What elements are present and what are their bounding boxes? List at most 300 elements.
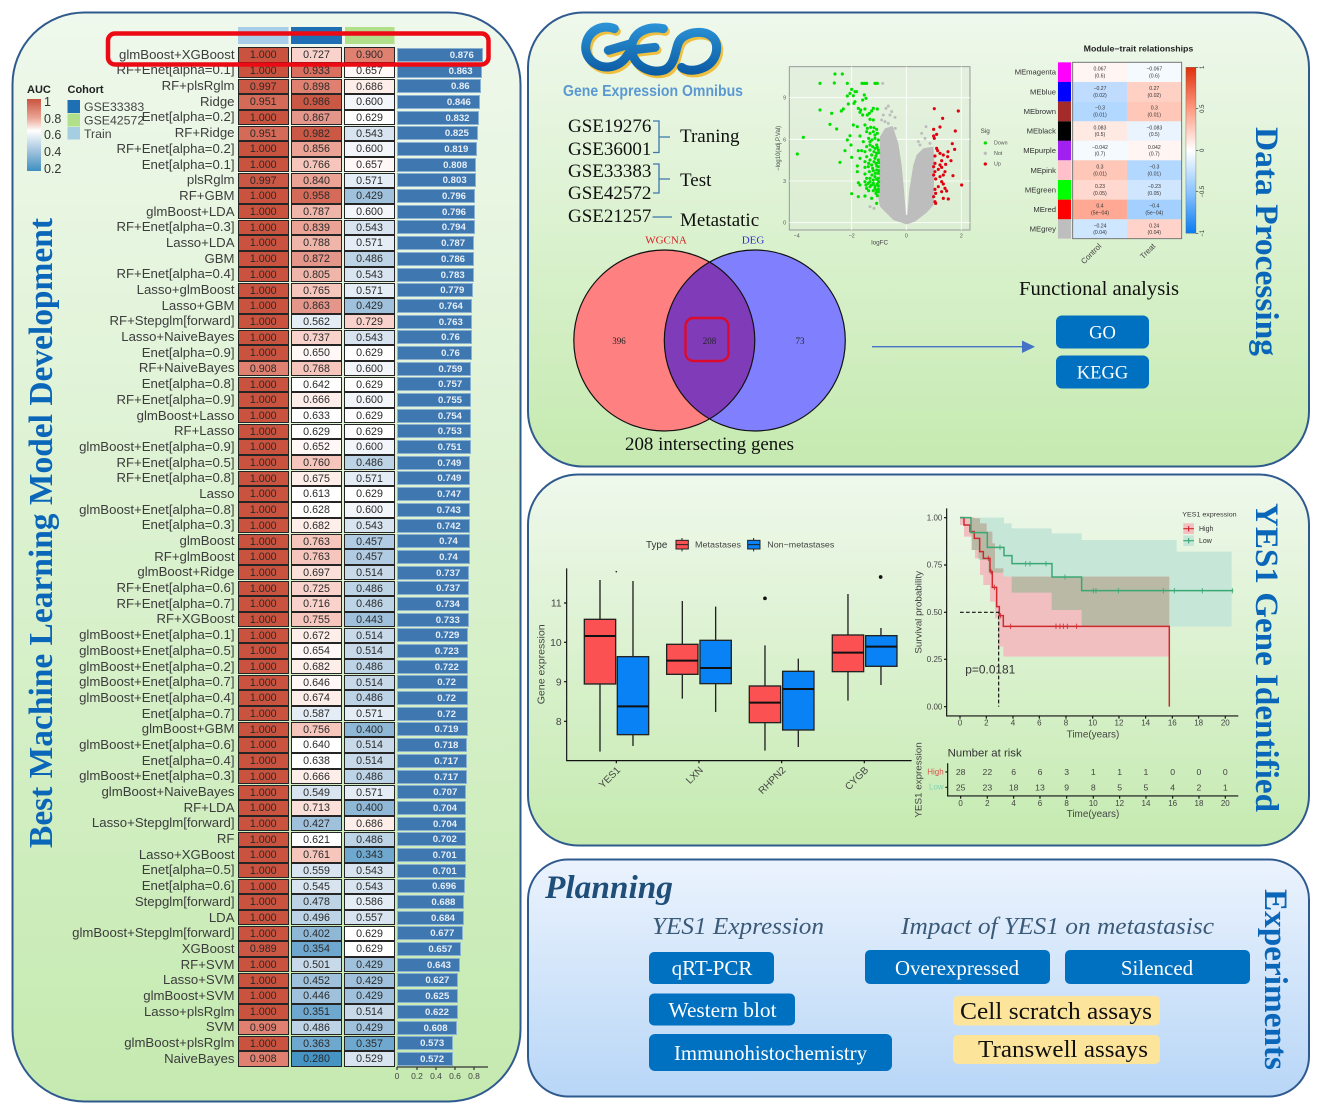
row: Enet 0.1: 0.808 <box>443 160 467 171</box>
row: RF+Enet 0.8: 0.675 <box>303 473 330 485</box>
row: Lasso+glmBoost: Lasso+glmBoost <box>137 282 234 297</box>
module-trait heatmap: (0.01) <box>1093 171 1107 177</box>
row: Enet 0.8: 0.642 <box>303 379 330 391</box>
row: Enet 0.1: 0.766 <box>303 159 330 171</box>
row: RF+Enet 0.3 <box>116 219 475 235</box>
module-trait heatmap: (0.05) <box>1093 191 1107 197</box>
number at risk table: Low <box>929 783 944 792</box>
row: SVM: 0.608 <box>424 1023 448 1034</box>
row: glmBoost+plsRglm: 1.000 <box>250 1038 277 1050</box>
row: RF+GBM: 1.000 <box>250 190 277 202</box>
number at risk table: 1 <box>1223 782 1228 792</box>
row: Enet 0.5 <box>0 863 500 878</box>
row: RF+XGBoost: 1.000 <box>250 614 277 626</box>
row: glmBoost+Enet 0.2: 0.682 <box>303 661 330 673</box>
row: RF+Enet 0.9: 0.600 <box>356 394 383 406</box>
row: glmBoost+SVM <box>0 988 500 1004</box>
row: RF+Ridge: 0.982 <box>303 128 330 140</box>
survival curve: Time(years) <box>1067 729 1119 740</box>
row: SVM: 0.486 <box>303 1022 330 1034</box>
row: Enet 0.3: 1.000 <box>250 520 277 532</box>
row: Stepglm: 0.586 <box>356 896 383 908</box>
volcano plot: 0 <box>783 221 786 227</box>
row: RF+glmBoost: 0.74 <box>439 552 458 563</box>
row: glmBoost+Ridge <box>137 564 469 580</box>
row: glmBoost+Enet 0.2: 0.486 <box>356 661 383 673</box>
dataset list: GSE19276 <box>568 116 651 137</box>
row: XGBoost: 0.989 <box>250 943 277 955</box>
row: RF+Enet 0.4: 0.805 <box>303 269 330 281</box>
legend: AUC colour scale: AUC <box>27 84 51 96</box>
row: Lasso+SVM: 0.429 <box>356 975 383 987</box>
number at risk table: Time(years) <box>1067 809 1119 820</box>
row: RF+Lasso: RF+Lasso <box>174 423 234 438</box>
row: glmBoost+Enet 0.5: 0.514 <box>356 645 383 657</box>
dataset list: Metastatic <box>680 210 759 231</box>
boxplot: gene expression: YES1 <box>597 765 623 791</box>
boxplot: gene expression: CYGB <box>843 765 871 793</box>
row: Lasso+plsRglm: 0.351 <box>303 1006 330 1018</box>
number at risk table: 28 <box>956 767 966 777</box>
row: glmBoost+Lasso: glmBoost+Lasso <box>137 408 234 423</box>
row: SVM: 0.909 <box>250 1022 277 1034</box>
row: glmBoost+Enet 0.4: 0.486 <box>356 692 383 704</box>
row: Lasso: 0.629 <box>356 488 383 500</box>
row: Enet 0.1 <box>142 157 476 172</box>
dataset list: GSE36001 <box>568 139 651 160</box>
row: glmBoost+plsRglm: 0.573 <box>420 1038 444 1049</box>
number at risk table: 8 <box>1064 799 1069 808</box>
row: Lasso+LDA <box>166 235 474 251</box>
row: Lasso+NaiveBayes: 1.000 <box>250 332 277 344</box>
row: RF+Enet 0.4 <box>116 266 474 282</box>
venn diagram: WGCNA <box>645 234 687 246</box>
row: Lasso+LDA: 0.788 <box>303 237 330 249</box>
row: Enet 0.1: 1.000 <box>250 159 277 171</box>
row: glmBoost+Enet 0.6: glmBoost+Enet[alpha=0.6] <box>79 737 234 752</box>
row: RF+Enet 0.8: RF+Enet[alpha=0.8] <box>116 470 234 485</box>
row: Lasso+LDA: Lasso+LDA <box>166 235 234 250</box>
number at risk table: 0 <box>1170 767 1175 777</box>
row: RF+Stepglm <box>110 313 472 329</box>
button: Immunohistochemistry <box>649 1034 892 1071</box>
boxplot: gene expression: RHPN2 <box>757 765 789 797</box>
module-trait heatmap: −1 <box>1200 229 1206 237</box>
module-trait heatmap: MEmagenta <box>1015 68 1057 77</box>
row: Enet 0.1: 0.657 <box>356 159 383 171</box>
row: RF+Enet 0.1: 1.000 <box>250 65 277 77</box>
row: XGBoost <box>0 941 500 957</box>
row: RF+GBM <box>179 188 475 204</box>
vertical title: Data Processing: Data Processing <box>1248 127 1284 357</box>
row: glmBoost+LDA: glmBoost+LDA <box>146 204 234 219</box>
module-trait heatmap: MEpurple <box>1023 146 1056 155</box>
legend: AUC colour scale: 1 <box>44 95 51 109</box>
vertical title: Experiments: Experiments <box>1257 889 1293 1070</box>
row: Enet 0.4 <box>0 753 500 769</box>
row: Enet 0.2: 1.000 <box>250 112 277 124</box>
row: glmBoost+Enet 0.9: glmBoost+Enet[alpha=0.9] <box>79 439 234 454</box>
number at risk table: 1 <box>1091 767 1096 777</box>
vertical title: Best Machine Learning Model Development: Best Machine Learning Model Development <box>23 217 60 848</box>
row: Enet 0.2: Enet[alpha=0.2] <box>142 109 234 124</box>
row: RF+NaiveBayes: RF+NaiveBayes <box>139 360 234 375</box>
row: RF+Enet 0.4: 0.783 <box>441 270 465 281</box>
row: Ridge: 0.600 <box>356 96 383 108</box>
row: LDA: 0.684 <box>431 913 455 924</box>
row: Enet 0.8: 0.757 <box>438 379 462 390</box>
volcano plot: Down <box>994 141 1008 147</box>
row: RF+Enet 0.2: RF+Enet[alpha=0.2] <box>116 141 234 156</box>
row: Lasso+Stepglm: 0.427 <box>303 818 330 830</box>
volcano plot: −log10(adj.P.Val) <box>776 126 782 171</box>
module-trait heatmap: Treat <box>1138 241 1158 261</box>
row: glmBoost+Ridge: 0.737 <box>436 568 460 579</box>
button: GO: GO <box>1089 324 1116 344</box>
row: Enet 0.1: Enet[alpha=0.1] <box>142 157 234 172</box>
row: RF+NaiveBayes: 0.759 <box>438 364 462 375</box>
row: RF+glmBoost: 0.763 <box>303 551 330 563</box>
volcano plot: 2 <box>960 233 963 239</box>
module-trait heatmap: 0.3 <box>1096 165 1104 171</box>
label: Transwell assays: Transwell assays <box>978 1036 1148 1063</box>
row: RF+Enet 0.5: 0.760 <box>303 457 330 469</box>
legend: AUC colour scale: 0.2 <box>44 162 61 176</box>
row: RF+Enet 0.5 <box>116 455 470 470</box>
legend: cohort: GSE42572 <box>84 114 144 128</box>
row: Enet 0.4: Enet[alpha=0.4] <box>142 753 234 768</box>
row: Enet 0.9: 0.76 <box>441 348 460 359</box>
row: RF+Enet 0.9: 1.000 <box>250 394 277 406</box>
module-trait heatmap: (0.5) <box>1149 132 1160 138</box>
row: glmBoost+XGBoost <box>119 47 483 62</box>
row: plsRglm: 0.997 <box>250 175 277 187</box>
row: glmBoost+Stepglm: 0.629 <box>356 928 383 940</box>
row: RF+Stepglm: 0.763 <box>439 317 463 328</box>
number at risk table: 6 <box>1038 767 1043 777</box>
volcano plot: 9 <box>783 96 786 102</box>
arrow to functional analysis <box>872 340 1035 353</box>
row: RF+plsRglm: 0.997 <box>250 81 277 93</box>
module-trait heatmap: (0.6) <box>1149 73 1160 79</box>
number at risk table: Number at risk <box>948 747 1022 759</box>
row: glmBoost+Enet 0.6: 1.000 <box>250 739 277 751</box>
row: RF+SVM: 0.429 <box>356 959 383 971</box>
row: RF+Enet 0.8: 0.749 <box>437 473 461 484</box>
row: RF+Enet 0.8 <box>116 470 470 486</box>
row: Lasso+NaiveBayes: 0.737 <box>303 332 330 344</box>
row: RF+Enet 0.6: RF+Enet[alpha=0.6] <box>116 580 234 595</box>
module-trait heatmap: −0.042 <box>1092 145 1108 151</box>
row: glmBoost+plsRglm: glmBoost+plsRglm <box>124 1035 234 1050</box>
vertical title: YES1 Gene Identified: YES1 Gene Identified <box>1248 503 1284 812</box>
row: glmBoost+Enet 0.9 <box>79 439 471 455</box>
row: Enet 0.6 <box>0 878 500 894</box>
row: RF+Lasso <box>174 423 471 439</box>
row: RF+Enet 0.1: 0.863 <box>449 66 473 77</box>
survival curve <box>914 508 1238 740</box>
row: RF+Enet 0.6 <box>116 580 469 596</box>
row: Lasso+GBM: Lasso+GBM <box>162 298 234 313</box>
number at risk table <box>913 742 1238 820</box>
row: glmBoost+Stepglm: 0.402 <box>303 928 330 940</box>
highlight box: top model <box>108 34 488 64</box>
row: GBM: 0.872 <box>303 253 330 265</box>
number at risk table: 0 <box>1197 767 1202 777</box>
row: glmBoost+NaiveBayes: 0.707 <box>433 787 457 798</box>
row: RF+Enet 0.5: 0.749 <box>437 458 461 469</box>
row: RF+Ridge: 0.951 <box>250 128 277 140</box>
row: glmBoost+Lasso: 0.754 <box>438 411 462 422</box>
row: Enet 0.3: Enet[alpha=0.3] <box>142 517 234 532</box>
module-trait heatmap: (0.6) <box>1095 73 1106 79</box>
row: RF+Enet 0.8: 1.000 <box>250 473 277 485</box>
row: RF+Stepglm: 0.562 <box>303 316 330 328</box>
row: RF+Enet 0.5: RF+Enet[alpha=0.5] <box>116 455 234 470</box>
number at risk table: 18 <box>1195 799 1204 808</box>
row: Lasso+NaiveBayes: 0.543 <box>356 332 383 344</box>
row: glmBoost+GBM: 1.000 <box>250 724 277 736</box>
row: Lasso+glmBoost: 1.000 <box>250 284 277 296</box>
boxplot: gene expression: Non−metastases <box>767 540 834 550</box>
row: RF+SVM: 0.643 <box>427 960 451 971</box>
panel: YES1 gene identified <box>528 474 1309 846</box>
cohort annotation strip <box>238 27 394 44</box>
row: Ridge: 0.846 <box>447 97 471 108</box>
row: glmBoost: 0.763 <box>303 536 330 548</box>
panel: planning experiments <box>528 860 1309 1096</box>
module-trait heatmap: MEred <box>1033 205 1056 214</box>
row: Lasso+XGBoost: 0.761 <box>303 849 330 861</box>
row: glmBoost+Enet 0.2: 1.000 <box>250 661 277 673</box>
row: Lasso+XGBoost <box>0 847 500 863</box>
button: KEGG <box>1056 356 1149 388</box>
module-trait heatmap: (0.04) <box>1148 230 1161 236</box>
row: Lasso: 0.747 <box>437 489 461 500</box>
row: Lasso+plsRglm: 0.514 <box>356 1006 383 1018</box>
row: Enet 0.9: 0.650 <box>303 347 330 359</box>
number at risk table: 13 <box>1035 782 1045 792</box>
row: glmBoost+Enet 0.4: 0.674 <box>303 692 330 704</box>
row: RF+Enet 0.6: 0.737 <box>436 583 460 594</box>
module-trait heatmap: MEblack <box>1027 127 1056 136</box>
boxplot: gene expression: 9 <box>556 677 562 688</box>
boxplot: gene expression: 8 <box>556 717 562 728</box>
row: Enet 0.8: 0.629 <box>356 379 383 391</box>
row: glmBoost+XGBoost: 0.900 <box>356 49 383 61</box>
row: glmBoost+Enet 0.3: glmBoost+Enet[alpha=0.3] <box>79 768 234 783</box>
row: glmBoost: glmBoost <box>180 533 234 548</box>
row: glmBoost+Enet 0.5: 1.000 <box>250 645 277 657</box>
row: glmBoost: 1.000 <box>250 536 277 548</box>
row: Enet 0.7 <box>0 706 500 722</box>
row: GBM <box>204 251 474 267</box>
logo caption: Gene Expression Omnibus <box>563 83 743 100</box>
row: glmBoost+Enet 0.4: glmBoost+Enet[alpha=0.4] <box>79 690 234 705</box>
row: RF+SVM: RF+SVM <box>181 957 234 972</box>
row: plsRglm: 0.571 <box>356 175 383 187</box>
row: Enet 0.5: 0.543 <box>356 865 383 877</box>
row: RF+Enet 0.3: 0.543 <box>356 222 383 234</box>
row: NaiveBayes: 0.908 <box>250 1053 277 1065</box>
number at risk table: 25 <box>956 782 966 792</box>
row: RF+Enet 0.7: 0.734 <box>436 599 460 610</box>
survival curve: YES1 expression <box>1182 512 1237 519</box>
row: SVM: SVM <box>206 1019 234 1034</box>
row: glmBoost+XGBoost: 0.876 <box>450 50 474 61</box>
row: glmBoost+Enet 0.1: glmBoost+Enet[alpha=0.1] <box>79 627 234 642</box>
heatmap and bar chart table <box>0 47 500 1069</box>
row: RF: 1.000 <box>250 834 277 846</box>
boxplot: gene expression: Type <box>646 540 668 551</box>
button: GO <box>1056 316 1149 348</box>
boxplot: gene expression: 11 <box>551 599 562 610</box>
survival curve: 0.75 <box>927 561 943 570</box>
row: RF+plsRglm: RF+plsRglm <box>162 78 234 93</box>
label: Cell scratch assays: Cell scratch assays <box>960 998 1152 1025</box>
legend: cohort <box>68 84 144 141</box>
survival curve: 1.00 <box>927 513 943 522</box>
row: glmBoost+Stepglm: 1.000 <box>250 928 277 940</box>
row: glmBoost+Enet 0.2 <box>79 659 468 674</box>
row: RF+Lasso: 0.629 <box>303 426 330 438</box>
row: RF+XGBoost: RF+XGBoost <box>156 611 234 626</box>
row: RF+Lasso: 0.629 <box>356 426 383 438</box>
module-trait heatmap: (0.01) <box>1148 113 1161 119</box>
venn caption: 208 intersecting genes <box>625 435 794 455</box>
row: Enet 0.9 <box>142 345 472 361</box>
survival curve: 20 <box>1221 719 1230 728</box>
row: Enet 0.9: 1.000 <box>250 347 277 359</box>
survival curve: p=0.0181 <box>965 663 1015 676</box>
button: Immunohistochemistry: Immunohistochemistry <box>674 1041 867 1065</box>
row: Lasso+glmBoost: 0.571 <box>356 284 383 296</box>
module-trait heatmap: −0.4 <box>1149 204 1160 210</box>
row: Enet 0.7: 1.000 <box>250 708 277 720</box>
row: glmBoost+Stepglm <box>0 926 500 941</box>
module-trait heatmap: −0.5 <box>1200 185 1206 198</box>
number at risk table: 8 <box>1091 782 1096 792</box>
number at risk table: 20 <box>1221 799 1230 808</box>
row: LDA: 0.557 <box>356 912 383 924</box>
dataset list: Traning <box>680 126 740 147</box>
module-trait heatmap: MEpink <box>1030 166 1056 175</box>
row: LDA: 1.000 <box>250 912 277 924</box>
module-trait heatmap: −0.3 <box>1095 106 1105 112</box>
row: glmBoost+Enet 0.7: 0.646 <box>303 677 330 689</box>
row: RF+Enet 0.2 <box>116 141 477 157</box>
row: Lasso+glmBoost <box>137 282 473 298</box>
button: qRT-PCR: qRT-PCR <box>672 956 752 980</box>
row: RF+Enet 0.8: 0.571 <box>356 473 383 485</box>
module-trait heatmap: −0.067 <box>1146 66 1162 72</box>
module-trait heatmap: 0.067 <box>1094 66 1107 72</box>
row: glmBoost: 0.74 <box>439 536 458 547</box>
button: Western blot <box>649 994 795 1026</box>
row: RF+SVM: 1.000 <box>250 959 277 971</box>
row: Enet 0.5: 1.000 <box>250 865 277 877</box>
row: glmBoost+Ridge: 0.697 <box>303 567 330 579</box>
row: GBM: 1.000 <box>250 253 277 265</box>
row: RF <box>0 831 500 847</box>
module-trait heatmap: 0 <box>1200 148 1206 152</box>
row: Enet 0.5: Enet[alpha=0.5] <box>142 862 234 877</box>
row: Lasso+SVM: 0.452 <box>303 975 330 987</box>
module-trait heatmap: (0.05) <box>1148 191 1161 197</box>
row: RF+Enet 0.2: 0.819 <box>444 144 468 155</box>
boxplot: gene expression: Metastases <box>695 540 741 550</box>
row: RF+Ridge: RF+Ridge <box>175 125 234 140</box>
row: glmBoost+Stepglm: glmBoost+Stepglm[forward] <box>72 925 234 940</box>
row: Lasso+GBM: 0.429 <box>356 300 383 312</box>
button: Silenced <box>1065 950 1250 984</box>
number at risk table: 2 <box>1197 782 1202 792</box>
row: Enet 0.7: 0.587 <box>303 708 330 720</box>
row: glmBoost+GBM: 0.400 <box>356 724 383 736</box>
survival curve: Survival probability <box>914 571 924 654</box>
module-trait heatmap: 0.27 <box>1149 86 1159 92</box>
row: XGBoost: XGBoost <box>182 941 234 956</box>
boxplot: gene expression: Gene expression <box>537 624 548 704</box>
bar chart axis: 0.6 <box>449 1071 461 1081</box>
row: glmBoost+Enet 0.7 <box>0 674 500 690</box>
row: glmBoost+LDA <box>146 204 475 219</box>
row: Enet 0.3: 0.543 <box>356 520 383 532</box>
row: Enet 0.3: 0.682 <box>303 520 330 532</box>
volcano plot: 6 <box>783 137 786 143</box>
number at risk table: 2 <box>985 799 990 808</box>
row: Ridge: 0.951 <box>250 96 277 108</box>
row: RF+Stepglm: RF+Stepglm[forward] <box>110 313 234 328</box>
volcano plot: −4 <box>794 233 800 239</box>
module-trait heatmap: −0.27 <box>1093 86 1107 92</box>
module-trait heatmap: (0.02) <box>1148 93 1161 99</box>
row: RF+Ridge: 0.825 <box>445 128 469 139</box>
row: glmBoost+Enet 0.3 <box>0 769 500 784</box>
row: RF+Enet 0.2: 1.000 <box>250 143 277 155</box>
legend: AUC colour scale: 0.6 <box>44 128 61 142</box>
survival curve: 0 <box>958 719 963 728</box>
module-trait heatmap: 0.042 <box>1148 145 1161 151</box>
row: RF: 0.486 <box>356 834 383 846</box>
row: glmBoost+Stepglm: 0.677 <box>430 928 454 939</box>
row: Lasso+NaiveBayes: Lasso+NaiveBayes <box>121 329 234 344</box>
bar chart axis: 0 <box>395 1071 400 1081</box>
volcano plot: logFC <box>871 240 889 247</box>
row: LDA: 0.496 <box>303 912 330 924</box>
module-trait heatmap: (5e−04) <box>1091 211 1109 217</box>
row: RF+GBM: 0.958 <box>303 190 330 202</box>
number at risk table: 5 <box>1117 782 1122 792</box>
survival curve: 18 <box>1194 719 1204 728</box>
row: Enet 0.9: 0.629 <box>356 347 383 359</box>
row: glmBoost+SVM: 0.625 <box>425 991 449 1002</box>
row: Lasso+NaiveBayes: 0.76 <box>441 332 460 343</box>
number at risk table: 23 <box>983 782 992 792</box>
row: plsRglm: plsRglm <box>187 172 234 187</box>
row: RF+plsRglm: 0.86 <box>451 81 470 92</box>
row: glmBoost+Enet 0.8: 0.628 <box>303 504 330 516</box>
row: glmBoost+GBM <box>0 722 500 737</box>
boxplot: gene expression: LXN <box>684 765 706 787</box>
row: glmBoost+Enet 0.8: 0.743 <box>437 505 461 516</box>
survival curve: 12 <box>1115 719 1124 728</box>
row: plsRglm <box>187 172 476 188</box>
row: RF+LDA: 0.400 <box>356 802 383 814</box>
row: Enet 0.7: Enet[alpha=0.7] <box>142 706 234 721</box>
row: glmBoost+NaiveBayes: 1.000 <box>250 786 277 798</box>
row: glmBoost+Enet 0.8: glmBoost+Enet[alpha=0.8] <box>79 502 234 517</box>
